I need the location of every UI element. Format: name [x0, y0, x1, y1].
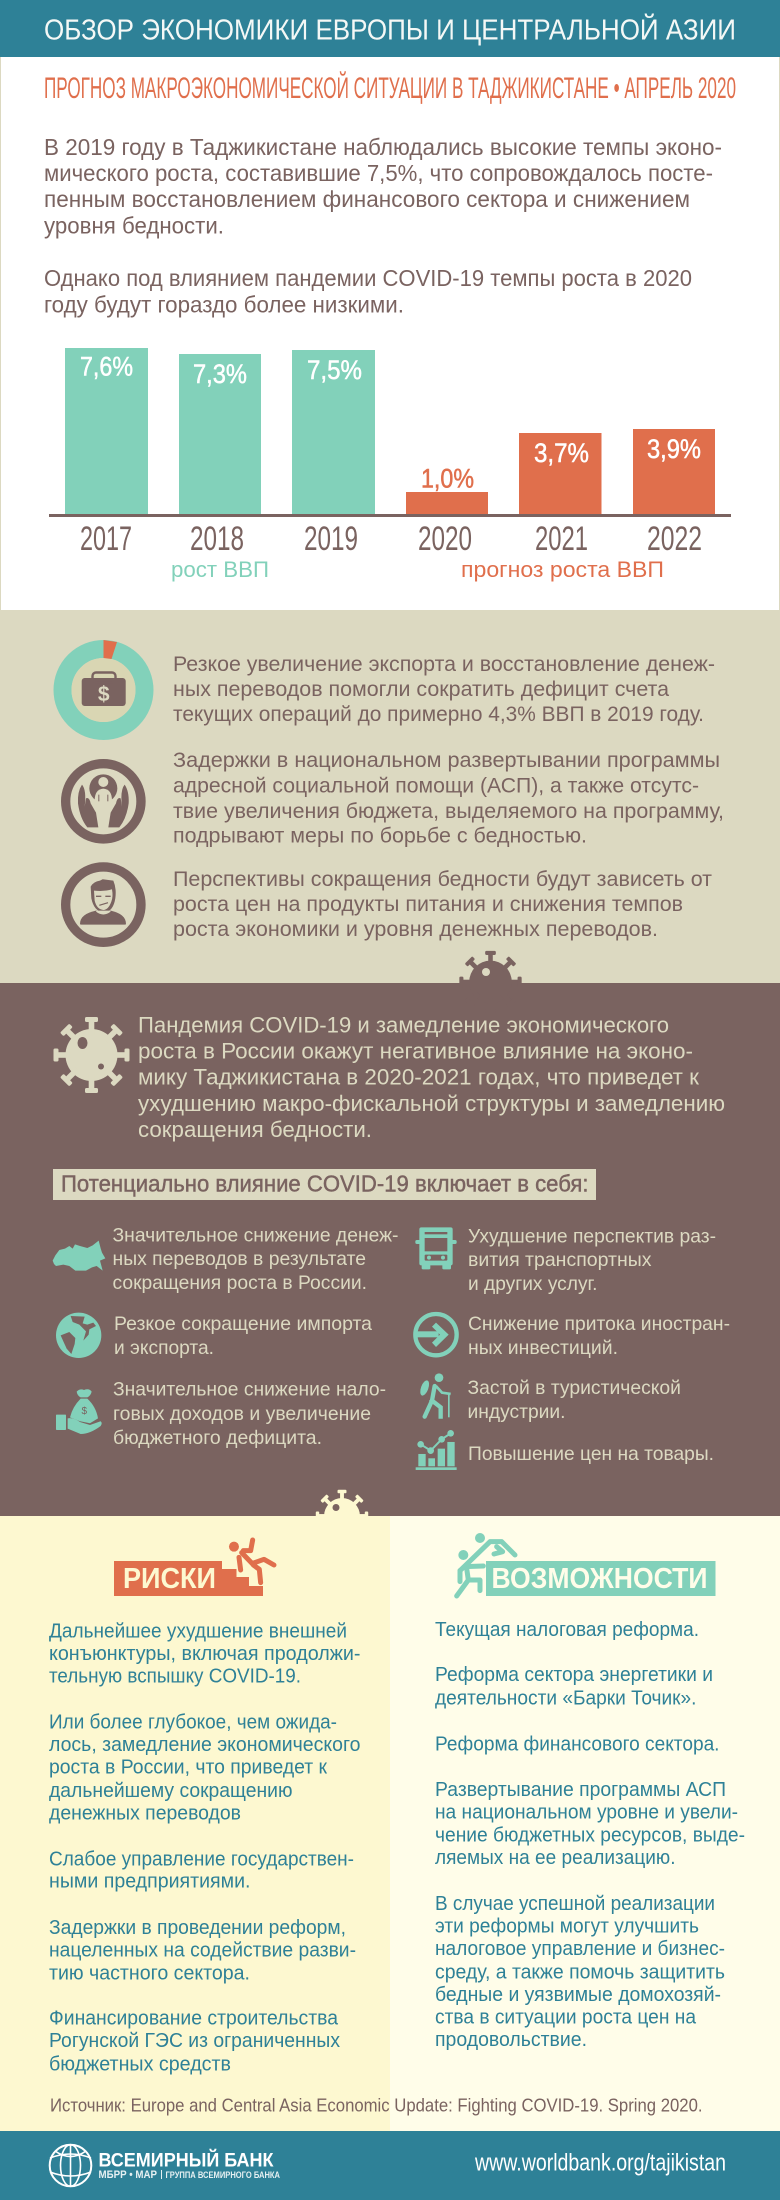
text: current account: текущих операций до примерно 4,3% ВВП в 2019 году. [173, 702, 704, 726]
opportunities text: Реформа финансового сектора. [435, 1732, 720, 1756]
bar chart: GDP growth [49, 348, 731, 582]
text: imports exports: Резкое сокращение импорта [114, 1313, 372, 1335]
risks heading with falling figure: РИСКИ [123, 1563, 216, 1595]
bar chart: GDP growth: рост ВВП [171, 557, 269, 582]
text: current account: ных переводов помогли сократить дефицит счета [173, 677, 669, 701]
bar chart: GDP growth: 2020 [418, 520, 472, 558]
panel: beige findings [0, 610, 780, 983]
icon: arrow in circle [415, 1314, 457, 1355]
text: transport: Ухудшение перспектив раз- [468, 1226, 716, 1248]
opportunities text: Развертывание программы АСП [435, 1778, 726, 1801]
icon: person face [66, 867, 141, 942]
intro text: году будут гораздо более низкими. [44, 292, 404, 318]
text: tax revenue: говых доходов и увеличение [113, 1403, 371, 1425]
text: foreign investment: ных инвестиций. [468, 1337, 618, 1359]
opportunities text: Текущая налоговая реформа. [435, 1618, 699, 1641]
text: tax revenue [113, 1378, 386, 1449]
text: pandemic: ухудшению макро-фискальной структуры и замедлению [138, 1091, 725, 1116]
text: tourism: индустрии. [468, 1401, 566, 1423]
risks text: тельную вспышку COVID-19. [49, 1664, 301, 1688]
text: current account [173, 652, 715, 726]
risks text: дальнейшему сокращению [49, 1779, 292, 1802]
risks text: лось, замедление экономического [49, 1733, 360, 1756]
opportunities text: ляемых на ее реализацию. [435, 1846, 676, 1869]
opportunities heading with climbing figures: ВОЗМОЖНОСТИ [492, 1563, 708, 1595]
bar chart: GDP growth: 1,0% [421, 464, 474, 494]
risks text: Рогунской ГЭС из ограниченных [49, 2029, 341, 2052]
text: prices: Повышение цен на товары. [468, 1443, 714, 1465]
text: foreign investment [468, 1313, 730, 1359]
text: tourism: Застой в туристической [468, 1377, 681, 1399]
bar chart: GDP growth: 2017 [80, 520, 132, 558]
text: social assistance: твие увеличения бюджета, выделяемого на программу, [173, 799, 724, 823]
risks text: роста в России, что приведет к [49, 1756, 328, 1778]
opportunities text: бедные и уязвимые домохозяй- [435, 1983, 721, 2006]
logo: World Bank: ВСЕМИРНЫЙ БАНК [98, 2148, 274, 2172]
website URL: www.worldbank.org/tajikistan [474, 2150, 726, 2176]
header band [0, 0, 780, 57]
logo: World Bank: ГРУППА ВСЕМИРНОГО БАНКА [166, 2170, 280, 2181]
page backgrounds [0, 57, 780, 610]
text: pandemic [138, 1012, 725, 1142]
text: poverty outlook: роста цен на продукты питания и снижения темпов [173, 892, 683, 916]
text: imports exports [114, 1313, 372, 1359]
text: poverty outlook [173, 867, 712, 941]
opportunities text: чение бюджетных ресурсов, выде- [435, 1824, 745, 1846]
risks text: Финансирование строительства [49, 2006, 339, 2030]
opportunities heading with climbing figures [457, 1533, 716, 1596]
text: social assistance: Задержки в национальном развертывании программы [173, 748, 720, 772]
icon: hiker [418, 1373, 451, 1417]
text: tourism [468, 1377, 681, 1423]
icon: large virus [54, 1017, 130, 1093]
bar chart: GDP growth: прогноз роста ВВП [461, 557, 664, 582]
text: remittances [112, 1224, 398, 1294]
bar chart: GDP growth: 2018 [190, 520, 244, 558]
text: transport [468, 1226, 716, 1295]
risks heading with falling figure [114, 1540, 274, 1596]
risks text: бюджетных средств [49, 2052, 231, 2076]
text: remittances: Значительное снижение денеж- [112, 1224, 398, 1246]
intro text: Однако под влиянием пандемии COVID-19 темпы роста в 2020 [44, 265, 692, 291]
risks text: Слабое управление государствен- [49, 1848, 354, 1870]
risks text: нацеленных на содействие разви- [49, 1938, 356, 1962]
bar chart: GDP growth: 2021 [535, 520, 588, 558]
opportunities text: налоговое управление и бизнес- [435, 1937, 725, 1960]
risks text: ными предприятиями. [49, 1870, 250, 1892]
impact heading: Потенциально влияние COVID-19 включает в себя: [61, 1170, 588, 1196]
text: transport: вития транспортных [468, 1249, 652, 1271]
text: social assistance: подрывают меры по борьбе с бедностью. [173, 824, 587, 848]
bar chart: GDP growth: 3,9% [647, 434, 701, 464]
text: pandemic: роста в России окажут негативное влияние на эконо- [138, 1038, 693, 1064]
logo: World Bank: МБРР • МАР [98, 2169, 157, 2181]
bar chart: GDP growth: 7,3% [193, 359, 247, 389]
logo: World Bank [50, 2145, 280, 2186]
opportunities text: деятельности «Барки Точик». [435, 1686, 696, 1710]
panel: risks [0, 1490, 390, 2131]
text: tax revenue: Значительное снижение нало- [113, 1378, 386, 1400]
text: tax revenue: бюджетного дефицита. [113, 1427, 322, 1449]
opportunities text: Реформа сектора энергетики и [435, 1663, 713, 1686]
opportunities text: ства в ситуации роста цен на [435, 2006, 697, 2028]
footer band [0, 2131, 780, 2200]
bar chart: GDP growth: 2019 [304, 520, 358, 558]
icon: virus bottom tab [316, 1490, 368, 1542]
opportunities text [435, 1618, 745, 2051]
intro text: пенным восстановлением финансового сектора и снижением [44, 186, 690, 212]
icon: globe [56, 1313, 101, 1358]
text: remittances: сокращения роста в России. [112, 1272, 367, 1294]
text: pandemic: Пандемия COVID-19 и замедление экономического [138, 1012, 669, 1038]
text: pandemic: сокращения бедности. [138, 1117, 372, 1142]
icon: rising chart [416, 1430, 457, 1470]
icon: bus [415, 1227, 457, 1269]
bar chart: GDP growth: 2022 [647, 520, 702, 558]
opportunities text: на национальном уровне и увели- [435, 1800, 738, 1824]
bar chart: GDP growth: 7,6% [80, 352, 133, 382]
source line: Источник: Europe and Central Asia Economic Update: Fighting COVID-19. Spring 2020. [50, 2096, 702, 2116]
text: pandemic: мику Таджикистана в 2020-2021 годах, что приведет к [138, 1064, 699, 1090]
risks text: денежных переводов [49, 1802, 241, 1824]
text: social assistance: адресной социальной помощи (АСП), а также отсутс- [173, 774, 699, 798]
risks text: конъюнктуры, включая продолжи- [49, 1642, 360, 1665]
intro text: уровня бедности. [44, 212, 224, 238]
risks text [49, 1620, 360, 2076]
risks text: Или более глубокое, чем ожида- [49, 1710, 337, 1734]
text: remittances: ных переводов в результате [112, 1248, 366, 1270]
icon: hands and person [66, 764, 141, 839]
bar chart: GDP growth: 7,5% [307, 355, 362, 385]
icon: money bag and hand [56, 1389, 102, 1434]
intro text: В 2019 году в Таджикистане наблюдались высокие темпы эконо- [44, 134, 722, 160]
bar chart: GDP growth: 3,7% [534, 438, 589, 468]
panel: opportunities [390, 1516, 780, 2131]
opportunities text: эти реформы могут улучшить [435, 1914, 699, 1938]
text: transport: и других услуг. [468, 1273, 598, 1295]
opportunities text: продовольствие. [435, 2028, 587, 2051]
icon: virus top tab [459, 951, 522, 1013]
icon: Russia map [53, 1241, 105, 1271]
risks text: тию частного сектора. [49, 1962, 250, 1984]
opportunities text: среду, а также помочь защитить [435, 1960, 725, 1984]
icon: donut with briefcase: $ [98, 683, 110, 706]
icon: donut with briefcase [62, 640, 144, 731]
text: poverty outlook: Перспективы сокращения бедности будут зависеть от [173, 867, 712, 891]
text: imports exports: и экспорта. [114, 1337, 214, 1359]
risks text: Задержки в проведении реформ, [49, 1916, 346, 1939]
icon: money bag and hand: $ [82, 1406, 88, 1417]
text: poverty outlook: роста экономики и уровня денежных переводов. [173, 917, 658, 941]
risks text: Дальнейшее ухудшение внешней [49, 1620, 347, 1642]
text: social assistance [173, 748, 724, 848]
intro text [44, 134, 722, 318]
text: current account: Резкое увеличение экспорта и восстановление денеж- [173, 652, 715, 676]
opportunities text: В случае успешной реализации [435, 1892, 715, 1915]
intro text: мического роста, составившие 7,5%, что сопровождалось посте- [44, 160, 713, 186]
panel: brown COVID impact [0, 951, 780, 1516]
text: foreign investment: Снижение притока иностран- [468, 1313, 730, 1335]
